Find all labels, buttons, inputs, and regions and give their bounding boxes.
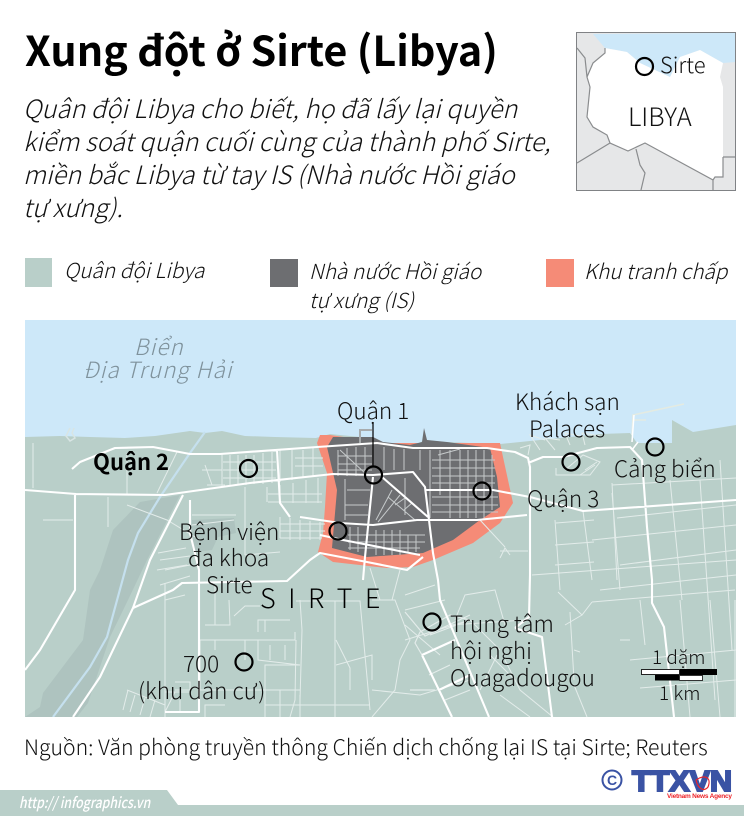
main roads xyxy=(25,443,736,717)
map labels: Quận 2 xyxy=(93,445,169,477)
map labels: SIRTE xyxy=(260,577,393,616)
map labels: Palaces xyxy=(529,412,605,444)
map labels: Quận 1 xyxy=(337,394,409,426)
map labels: Cảng biển xyxy=(614,452,716,484)
source line: Nguồn: Văn phòng truyền thông Chiến dịch chống lại IS tại Sirte; Reuters xyxy=(24,731,708,762)
map labels xyxy=(83,330,716,706)
legend: Nhà nước Hồi giáo xyxy=(309,255,481,285)
map labels: Địa Trung Hải xyxy=(83,353,235,385)
agency logo xyxy=(602,766,732,800)
main map xyxy=(25,320,736,717)
map labels: hội nghị xyxy=(450,634,532,666)
intro text: miền bắc Libya từ tay IS (Nhà nước Hồi giáo xyxy=(23,156,515,192)
place markers xyxy=(236,438,664,670)
inset locator map: Sirte xyxy=(660,48,706,80)
map labels: Biển xyxy=(134,330,184,362)
legend: Quân đội Libya xyxy=(64,254,204,284)
inset locator map: LIBYA xyxy=(628,97,692,134)
intro text: Quân đội Libya cho biết, họ đã lấy lại quyền xyxy=(23,90,517,126)
map labels: Ouagadougou xyxy=(450,661,595,693)
map labels: (khu dân cư) xyxy=(138,674,265,706)
legend xyxy=(25,254,728,314)
map labels: Sirte xyxy=(206,568,253,600)
minor streets xyxy=(33,443,236,570)
map labels: 1 km xyxy=(659,679,700,706)
footer band xyxy=(0,790,744,816)
scale bar xyxy=(642,669,717,680)
intro text: kiểm soát quận cuối cùng của thành phố Sirte, xyxy=(23,123,550,159)
legend: tự xưng (IS) xyxy=(309,284,414,314)
map labels: Khách sạn xyxy=(515,385,620,417)
map labels: Bệnh viện xyxy=(179,515,279,547)
intro text: tự xưng). xyxy=(23,189,123,225)
contested zone xyxy=(317,435,513,568)
agency logo: C xyxy=(607,772,617,788)
map labels: Quận 3 xyxy=(527,482,599,514)
IS zone xyxy=(327,428,500,557)
legend: Khu tranh chấp xyxy=(584,255,727,285)
map labels: đa khoa xyxy=(188,541,269,573)
map labels: Trung tâm xyxy=(450,607,554,639)
intro text xyxy=(23,90,550,225)
map labels: 700 xyxy=(183,647,219,679)
title: Xung đột ở Sirte (Libya) xyxy=(25,18,498,78)
agency logo: Vietnam News Agency xyxy=(667,793,732,800)
map labels: 1 dặm xyxy=(652,643,705,670)
footer url: http:// infographics.vn xyxy=(19,792,150,813)
agency logo: TTXVN xyxy=(632,766,732,798)
